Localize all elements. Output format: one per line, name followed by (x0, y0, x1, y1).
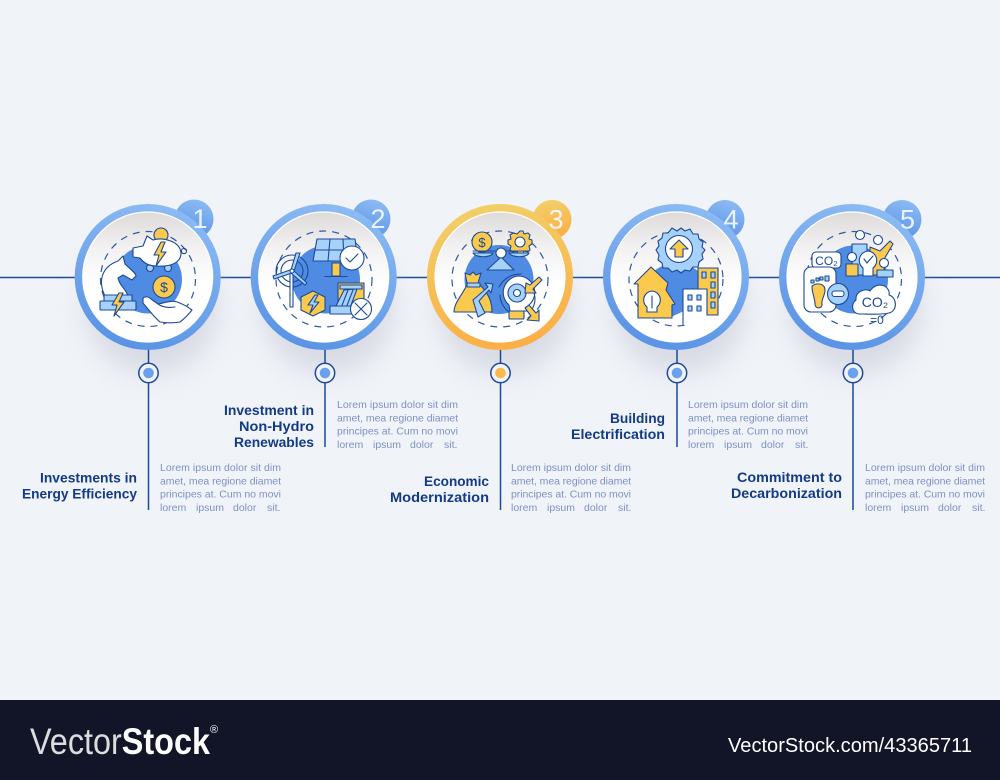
circle shadow 5 (790, 242, 922, 374)
body text 2: sit. (444, 439, 457, 451)
title 5: Commitment to (737, 470, 842, 485)
title 5 (731, 470, 842, 501)
icon: CO2 footprint, people and cloud: CO₂ (815, 254, 838, 268)
icon: gear with arrow, house with bulb and buildings (629, 228, 723, 326)
number badge 4 (706, 200, 744, 239)
body text 4: Lorem ipsum dolor sit dim (688, 399, 808, 411)
body text 4: sit. (795, 439, 808, 451)
body text 4: principes at. Cum no movi (688, 426, 808, 438)
icon: CO2 footprint, people and cloud (804, 230, 902, 327)
ring 5 (779, 204, 925, 350)
body text 3: sit. (618, 502, 631, 514)
body text 1: dolor (233, 502, 257, 514)
title 5: Decarbonization (731, 486, 842, 501)
body text 3: Lorem ipsum dolor sit dim (511, 462, 631, 474)
circle shadow 4 (614, 242, 746, 374)
connector and marker 1 (139, 345, 158, 510)
number badge 1 (174, 200, 214, 238)
body text 3: dolor (584, 502, 608, 514)
footer image id: VectorStock.com/43365711 (728, 735, 972, 757)
inner disc 1 (83, 212, 213, 342)
title 1: Investments in (40, 470, 137, 486)
body text 1 (160, 462, 281, 514)
body text 5: lorem (865, 502, 892, 514)
body text 5: Lorem ipsum dolor sit dim (865, 462, 985, 474)
step 2 (224, 200, 458, 451)
body text 5: sit. (972, 502, 985, 514)
inner disc 2 (259, 212, 389, 342)
step 1 (22, 200, 281, 514)
body text 1: sit. (267, 502, 280, 514)
title 4: Building (610, 411, 665, 426)
inner disc 3 (435, 212, 565, 342)
step 4 (571, 200, 808, 451)
body text 3: principes at. Cum no movi (511, 489, 631, 501)
body text 2: lorem (337, 439, 364, 451)
number 3: 3 (548, 204, 564, 234)
ring 3 (427, 204, 573, 350)
body text 3: lorem (511, 502, 538, 514)
body text 1: ipsum (196, 502, 224, 514)
body text 5: amet, mea regione diamet (865, 475, 985, 487)
body text 1: amet, mea regione diamet (160, 475, 281, 487)
body text 2: ipsum (373, 439, 401, 451)
ring 4 (603, 204, 749, 350)
title 4 (571, 411, 665, 442)
title 3 (390, 474, 489, 505)
body text 3: amet, mea regione diamet (511, 475, 631, 487)
footer bar (0, 700, 1000, 780)
number 4: 4 (724, 204, 739, 234)
body text 2 (337, 399, 458, 451)
body text 1: principes at. Cum no movi (160, 489, 281, 501)
step 3 (390, 200, 631, 514)
number badge 5 (882, 200, 922, 239)
body text 4: dolor (761, 439, 785, 451)
body text 4: ipsum (724, 439, 752, 451)
body text 1: Lorem ipsum dolor sit dim (160, 462, 281, 474)
number 1: 1 (192, 204, 208, 234)
body text 5 (865, 462, 985, 514)
body text 3 (511, 462, 631, 514)
icon: CO2 footprint, people and cloud: CO₂ (862, 294, 888, 310)
title 3: Modernization (390, 490, 489, 505)
inner disc 5 (787, 212, 917, 342)
connector and marker 2 (315, 345, 335, 447)
body text 3: ipsum (547, 502, 575, 514)
body text 5: ipsum (901, 502, 929, 514)
number 5: 5 (900, 204, 915, 234)
connector and marker 5 (843, 345, 863, 510)
icon: piggy bank, chess knight, coin and hand: $ (160, 279, 168, 295)
title 1 (22, 470, 137, 502)
body text 1: lorem (160, 502, 187, 514)
body text 2: dolor (410, 439, 434, 451)
title 4: Electrification (571, 427, 665, 442)
number badge 2 (352, 200, 390, 238)
circle shadow 1 (86, 242, 218, 374)
connector and marker 4 (667, 345, 687, 447)
title 3: Economic (424, 474, 489, 489)
title 2: Investment in (224, 403, 314, 418)
body text 4 (688, 399, 808, 451)
horizontal timeline (0, 276, 1000, 278)
icon: piggy bank, chess knight, coin and hand (100, 228, 196, 326)
body text 2: Lorem ipsum dolor sit dim (337, 399, 458, 411)
footer logo: VectorStock (30, 721, 210, 762)
body text 5: dolor (938, 502, 962, 514)
step 5 (731, 200, 985, 514)
icon: scales, gear, money bag and light bulb (452, 231, 548, 327)
icon: CO2 footprint, people and cloud: =0 (870, 313, 884, 327)
icon: scales, gear, money bag and light bulb: $ (478, 235, 486, 250)
circle shadow 3 (438, 242, 570, 374)
body text 5: principes at. Cum no movi (865, 489, 985, 501)
title 2: Non-Hydro (239, 419, 314, 434)
registered mark: ® (210, 724, 218, 736)
ring 1 (75, 204, 221, 350)
title 1: Energy Efficiency (22, 486, 137, 502)
body text 2: amet, mea regione diamet (337, 412, 458, 424)
icon: wind turbine, solar panel, hexagon and dam (273, 231, 372, 327)
body text 2: principes at. Cum no movi (337, 426, 458, 438)
inner disc 4 (611, 212, 741, 342)
number 2: 2 (370, 204, 386, 234)
body text 4: amet, mea regione diamet (688, 412, 808, 424)
body text 4: lorem (688, 439, 715, 451)
number badge 3 (532, 200, 572, 239)
ring 2 (251, 204, 397, 350)
circle shadow 2 (262, 242, 394, 374)
title 2 (224, 403, 314, 450)
connector and marker 3 (491, 345, 510, 510)
title 2: Renewables (234, 435, 314, 450)
